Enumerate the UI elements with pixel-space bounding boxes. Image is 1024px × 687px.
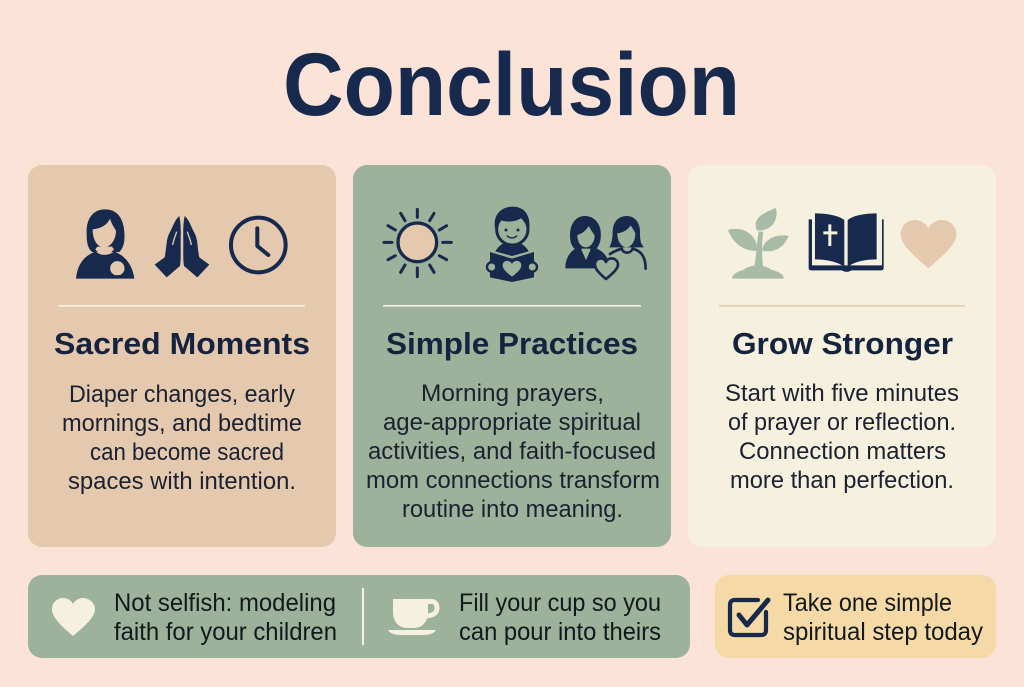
- text: not selfish: Not selfish: modeling: [114, 589, 336, 617]
- body text: [725, 380, 959, 494]
- heading: Grow Stronger: [732, 326, 953, 361]
- panel: grow stronger: [688, 165, 996, 547]
- icon: sun: [384, 209, 451, 277]
- icon: two women with heart: [565, 216, 646, 279]
- body text: of prayer or reflection.: [728, 409, 956, 436]
- body text: [62, 381, 302, 495]
- icon: clock: [231, 218, 286, 272]
- text: take one step: [783, 589, 983, 646]
- icon: child reading book: [487, 207, 537, 282]
- body text: routine into meaning.: [402, 496, 623, 523]
- body text: mom connections transform: [366, 467, 660, 494]
- text: take one step: spiritual step today: [783, 618, 983, 646]
- text: fill your cup: [459, 589, 661, 646]
- panel: sacred moments: [28, 165, 336, 547]
- body text: Diaper changes, early: [69, 381, 296, 408]
- title: Conclusion: [283, 34, 740, 134]
- panel: reminder bar: [28, 575, 690, 658]
- icon: heart: [901, 220, 956, 268]
- icon: heart: [52, 598, 95, 636]
- body text: can become sacred: [90, 439, 284, 466]
- body text: Morning prayers,: [421, 380, 604, 407]
- panel: call to action: [715, 575, 996, 658]
- text: take one step: Take one simple: [783, 589, 952, 617]
- body text: mornings, and bedtime: [62, 410, 302, 437]
- icon: seedling: [728, 208, 789, 279]
- icons: sun, child reading, two women: [384, 207, 646, 282]
- icons: plant, bible, heart: [728, 208, 956, 279]
- icon: open bible with cross: [809, 213, 884, 272]
- text: fill your cup: can pour into theirs: [459, 618, 661, 646]
- icons: mother, praying hands, clock: [76, 209, 286, 279]
- icon: checkbox: [730, 600, 768, 635]
- text: not selfish: [114, 589, 337, 646]
- heading: Simple Practices: [386, 326, 638, 361]
- body text: activities, and faith-focused: [368, 438, 656, 465]
- body text: [366, 380, 660, 523]
- body text: age-appropriate spiritual: [383, 409, 641, 436]
- text: not selfish: faith for your children: [114, 618, 337, 646]
- body text: more than perfection.: [730, 467, 954, 494]
- icon: cup and saucer: [388, 599, 437, 635]
- panel: simple practices: [353, 165, 671, 547]
- body text: spaces with intention.: [68, 468, 296, 495]
- icon: praying hands: [155, 216, 209, 277]
- body text: Start with five minutes: [725, 380, 959, 407]
- heading: Sacred Moments: [54, 326, 310, 361]
- body text: Connection matters: [739, 438, 946, 465]
- text: fill your cup: Fill your cup so you: [459, 589, 661, 617]
- icon: mother with baby: [76, 209, 134, 279]
